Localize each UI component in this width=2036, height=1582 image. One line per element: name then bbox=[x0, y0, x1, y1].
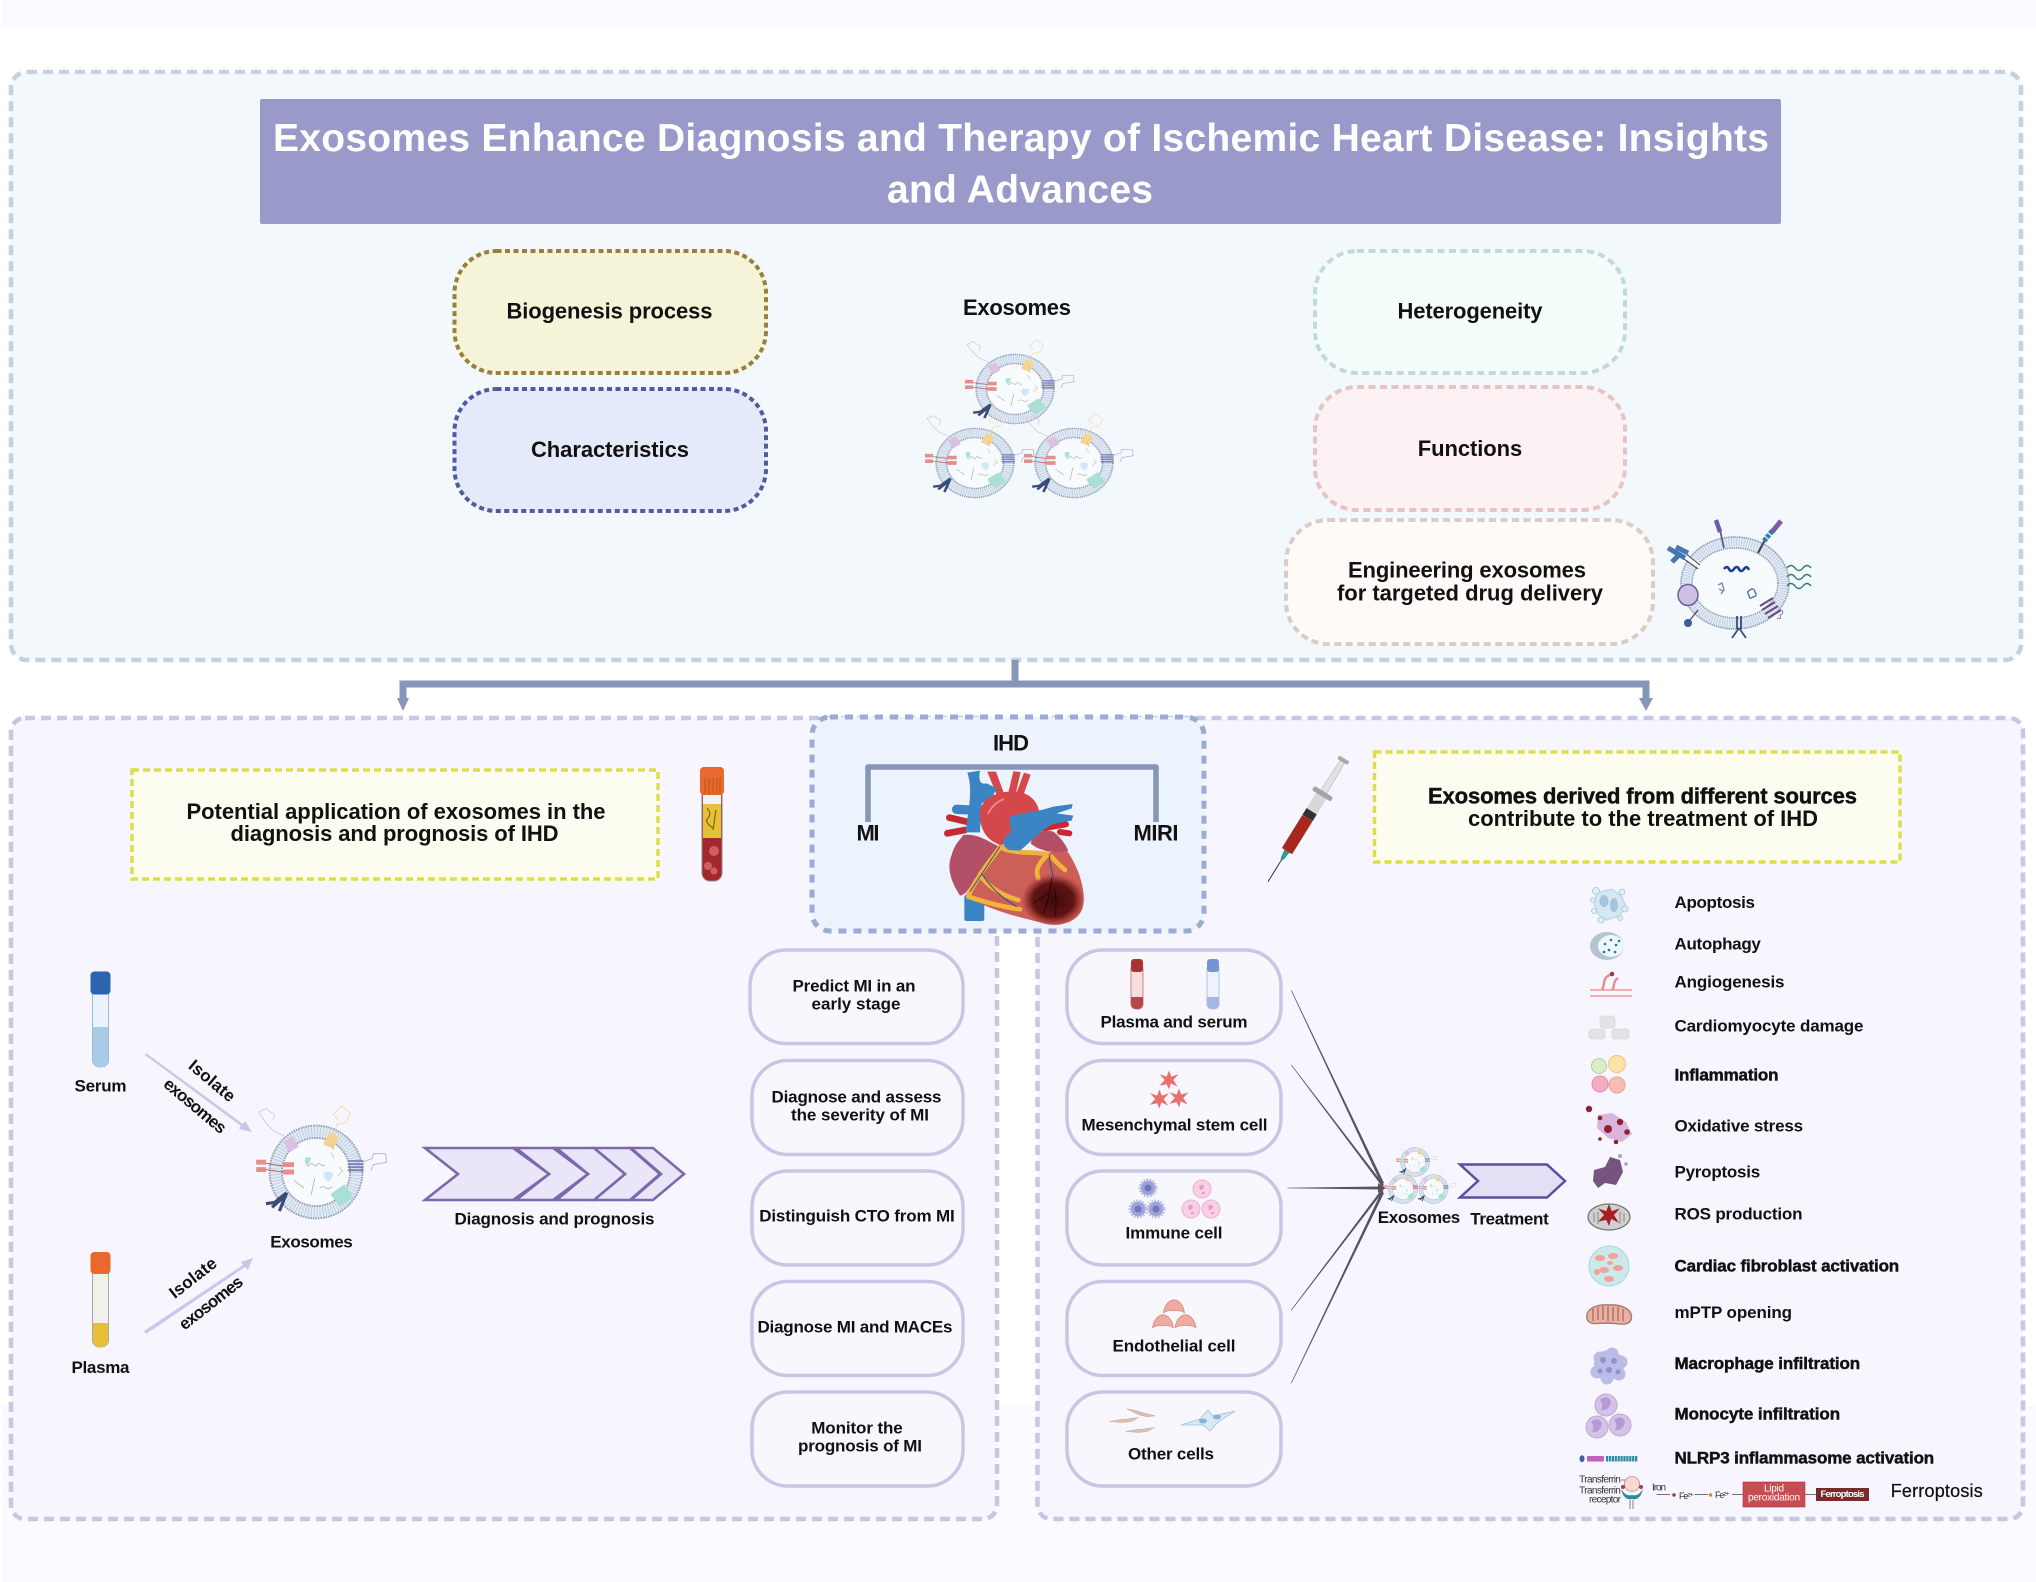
text: pyroptosis: Pyroptosis bbox=[1674, 1162, 1760, 1182]
converging arrows bbox=[1288, 990, 1386, 1383]
label: treatment: Treatment bbox=[1470, 1210, 1549, 1228]
label: MIRI: MIRI bbox=[1134, 820, 1178, 846]
icon: engineered exosome bbox=[1668, 520, 1811, 638]
box: diagnose and assess bbox=[752, 1060, 963, 1154]
arrow: plasma to exosomes: exosomes bbox=[175, 1272, 247, 1334]
diagram: ferroptosis pathway bbox=[1579, 1474, 1869, 1509]
box: distinguish CTO bbox=[752, 1171, 963, 1265]
heading box: diagnosis: Potential application of exosomes in the bbox=[186, 799, 606, 824]
label: diagnosis and prognosis: Diagnosis and prognosis bbox=[454, 1210, 654, 1228]
text: cardiac fibroblast activation: Cardiac fibroblast activation bbox=[1674, 1256, 1899, 1276]
panel: IHD bbox=[812, 717, 1204, 931]
diagram: ferroptosis pathway: Fe²⁺ bbox=[1715, 1490, 1730, 1500]
diagram: ferroptosis pathway: Ferroptosis bbox=[1820, 1489, 1864, 1500]
icon: small exosomes bbox=[1384, 1141, 1456, 1203]
text: cardiomyocyte damage: Cardiomyocyte damage bbox=[1674, 1016, 1864, 1036]
title banner: Exosomes Enhance Diagnosis and Therapy of Ischemic Heart Disease: Insights bbox=[273, 117, 1769, 160]
icon: serum tube bbox=[74, 972, 126, 1096]
arrow: serum to exosomes: Isolate bbox=[185, 1056, 239, 1106]
text: oxidative stress: Oxidative stress bbox=[1674, 1116, 1803, 1136]
diagram: ferroptosis pathway: Fe²⁺ bbox=[1679, 1491, 1694, 1501]
box: functions bbox=[1315, 387, 1625, 510]
text: monocyte infiltration: Monocyte infiltration bbox=[1674, 1404, 1840, 1424]
diagram: ferroptosis pathway: receptor bbox=[1589, 1494, 1622, 1506]
box: biogenesis process: Biogenesis process bbox=[506, 298, 712, 324]
heading box: treatment bbox=[1374, 752, 1900, 862]
icon: other cells bbox=[1110, 1405, 1235, 1432]
icon: pyroptosis bbox=[1593, 1154, 1628, 1188]
diagram: ferroptosis pathway: Transferrin bbox=[1579, 1486, 1621, 1496]
text: autophagy: Autophagy bbox=[1674, 934, 1761, 954]
label: exosomes: Exosomes bbox=[1378, 1208, 1460, 1227]
icon: autophagy bbox=[1590, 932, 1624, 960]
box: plasma and serum bbox=[1067, 950, 1281, 1044]
arrow: treatment bbox=[1460, 1164, 1565, 1198]
icon: inflammation bbox=[1592, 1056, 1626, 1093]
icon: apoptosis bbox=[1590, 888, 1628, 923]
text: mPTP opening: mPTP opening bbox=[1674, 1303, 1792, 1322]
box: plasma and serum: Plasma and serum bbox=[1100, 1012, 1248, 1032]
box: characteristics: Characteristics bbox=[531, 437, 689, 462]
icon: ROS production bbox=[1588, 1204, 1630, 1230]
icon: serum tube: Serum bbox=[74, 1076, 126, 1096]
box: diagnose MI and MACEs bbox=[752, 1282, 963, 1376]
icon: monocyte bbox=[1586, 1394, 1631, 1438]
icon: macrophage bbox=[1590, 1348, 1628, 1384]
panel: diagnosis and prognosis bbox=[11, 718, 997, 1519]
icon: angiogenesis bbox=[1590, 972, 1632, 996]
box: other cells bbox=[1067, 1392, 1281, 1486]
icon: three exosomes bbox=[925, 340, 1133, 498]
title banner bbox=[260, 99, 1781, 224]
icon: syringe bbox=[1259, 753, 1354, 887]
title banner: and Advances bbox=[887, 168, 1153, 212]
icon: NLRP3 bbox=[1580, 1455, 1638, 1462]
arrow: serum to exosomes bbox=[145, 1053, 252, 1138]
arrow: serum to exosomes: exosomes bbox=[160, 1074, 230, 1138]
diagram: ferroptosis pathway: Lipid bbox=[1764, 1484, 1784, 1494]
label: exosomes: Exosomes bbox=[963, 295, 1071, 320]
text: ROS production: ROS production bbox=[1674, 1204, 1802, 1224]
panel: treatment bbox=[1038, 718, 2023, 1519]
panel: exosomes overview bbox=[11, 72, 2021, 660]
diagram: ferroptosis pathway: Iron bbox=[1652, 1482, 1666, 1494]
text: macrophage infiltration: Macrophage infiltration bbox=[1674, 1354, 1860, 1373]
box: mesenchymal stem cell bbox=[1067, 1060, 1281, 1154]
box: diagnose MI and MACEs: Diagnose MI and MACEs bbox=[758, 1318, 952, 1336]
box: endothelial cell: Endothelial cell bbox=[1112, 1336, 1236, 1356]
text: apoptosis: Apoptosis bbox=[1674, 893, 1755, 912]
box: monitor prognosis: prognosis of MI bbox=[798, 1436, 922, 1456]
box: distinguish CTO: Distinguish CTO from MI bbox=[759, 1206, 955, 1226]
text: angiogenesis: Angiogenesis bbox=[1674, 972, 1784, 992]
box: endothelial cell bbox=[1067, 1282, 1281, 1376]
label: IHD: IHD bbox=[993, 730, 1029, 756]
box: diagnose and assess: the severity of MI bbox=[791, 1106, 929, 1124]
icon: cardiac fibroblast bbox=[1589, 1246, 1629, 1286]
box: heterogeneity: Heterogeneity bbox=[1398, 298, 1543, 324]
box: diagnose and assess: Diagnose and assess bbox=[772, 1088, 942, 1106]
box: other cells: Other cells bbox=[1128, 1444, 1214, 1464]
box: characteristics bbox=[454, 389, 766, 511]
box: monitor prognosis bbox=[752, 1392, 963, 1486]
box: predict MI: early stage bbox=[812, 994, 900, 1014]
text: inflammation: Inflammation bbox=[1674, 1066, 1778, 1084]
box: predict MI: Predict MI in an bbox=[792, 976, 916, 996]
icon: heart bbox=[947, 771, 1085, 926]
icon: exosome bbox=[256, 1106, 387, 1218]
box: biogenesis process bbox=[454, 251, 766, 373]
diagram: ferroptosis pathway: peroxidation bbox=[1748, 1492, 1800, 1504]
icon: plasma and serum tubes bbox=[1131, 959, 1219, 1009]
arrow: plasma to exosomes bbox=[144, 1254, 253, 1334]
icon: cardiomyocyte damage bbox=[1589, 1016, 1629, 1039]
label: exosomes: Exosomes bbox=[270, 1232, 353, 1252]
text: ferroptosis: Ferroptosis bbox=[1891, 1481, 1983, 1501]
heading box: diagnosis: diagnosis and prognosis of IHD bbox=[230, 821, 558, 846]
arrow: plasma to exosomes: Isolate bbox=[165, 1254, 221, 1302]
box: heterogeneity bbox=[1315, 251, 1625, 373]
bracket: MI and MIRI bbox=[868, 767, 1156, 822]
icon: immune cells bbox=[1130, 1180, 1220, 1218]
diagram: ferroptosis pathway: Transferrin bbox=[1579, 1474, 1621, 1486]
box: immune cell bbox=[1067, 1171, 1281, 1265]
box: predict MI bbox=[750, 950, 963, 1044]
heading box: treatment: Exosomes derived from different sources bbox=[1428, 784, 1857, 808]
icon: endothelial cells bbox=[1153, 1300, 1196, 1328]
icon: plasma tube bbox=[72, 1252, 130, 1377]
box: mesenchymal stem cell: Mesenchymal stem cell bbox=[1082, 1116, 1268, 1134]
box: monitor prognosis: Monitor the bbox=[811, 1418, 903, 1438]
box: engineering exosomes: for targeted drug delivery bbox=[1337, 580, 1604, 606]
box: engineering exosomes: Engineering exosomes bbox=[1348, 558, 1586, 582]
box: functions: Functions bbox=[1418, 436, 1522, 461]
icon: plasma tube: Plasma bbox=[72, 1358, 130, 1377]
heading box: diagnosis bbox=[132, 770, 658, 879]
box: engineering exosomes bbox=[1286, 520, 1653, 644]
icon: stem cells bbox=[1150, 1070, 1188, 1108]
box: immune cell: Immune cell bbox=[1126, 1224, 1222, 1242]
icon: oxidative stress bbox=[1586, 1106, 1632, 1144]
text: NLRP3: NLRP3 inflammasome activation bbox=[1674, 1448, 1934, 1468]
icon: blood tube bbox=[700, 767, 724, 881]
arrow: diagnosis chevrons bbox=[425, 1148, 684, 1200]
label: MI: MI bbox=[856, 820, 880, 846]
arrow: connector from overview to panels bbox=[397, 660, 1653, 711]
heading box: treatment: contribute to the treatment of IHD bbox=[1468, 806, 1818, 831]
icon: mPTP bbox=[1587, 1305, 1631, 1324]
